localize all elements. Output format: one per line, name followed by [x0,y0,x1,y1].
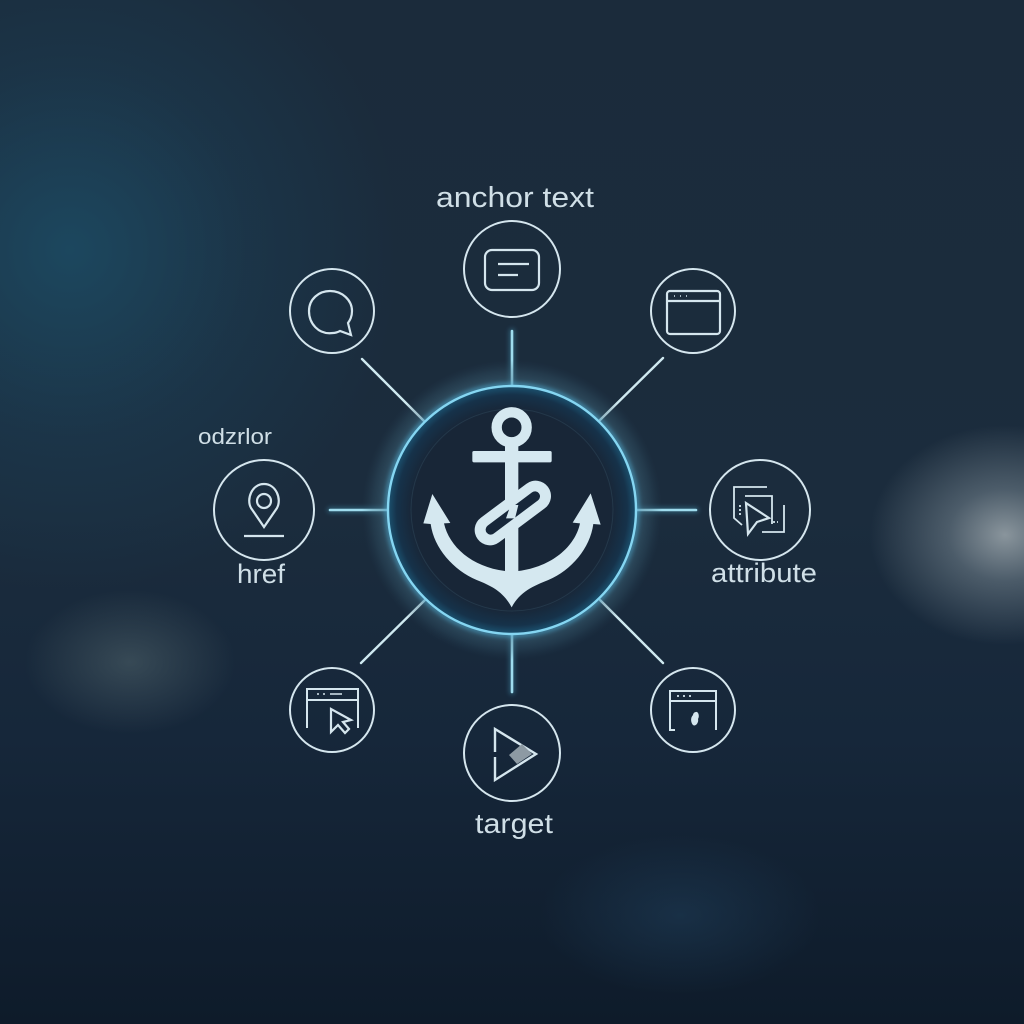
node: browser window [651,269,735,353]
node: attribute [710,460,810,560]
label: target: target [475,808,553,839]
label: attribute: attribute [711,558,817,588]
icon: browser window [667,291,720,334]
node: browser glyph [651,668,735,752]
node: href [214,460,314,560]
node: speech bubble [290,269,374,353]
connector lines [330,331,696,692]
icon: layered cursor [734,487,784,534]
node: anchor text [464,221,560,317]
label: stray caption: odzrlor [198,424,272,449]
label: anchor text: anchor text [436,182,594,214]
icon: browser with glyph [670,691,716,730]
icon: text card [485,250,539,290]
icon: browser with cursor [307,689,358,733]
icon: anchor with chain link [423,412,601,607]
icon: location pin [244,484,284,536]
icon: play triangle [495,729,536,780]
icon: speech bubble [309,291,352,335]
node: target [464,705,560,801]
central hub [362,360,662,660]
label: href: href [237,559,286,589]
node: browser cursor [290,668,374,752]
